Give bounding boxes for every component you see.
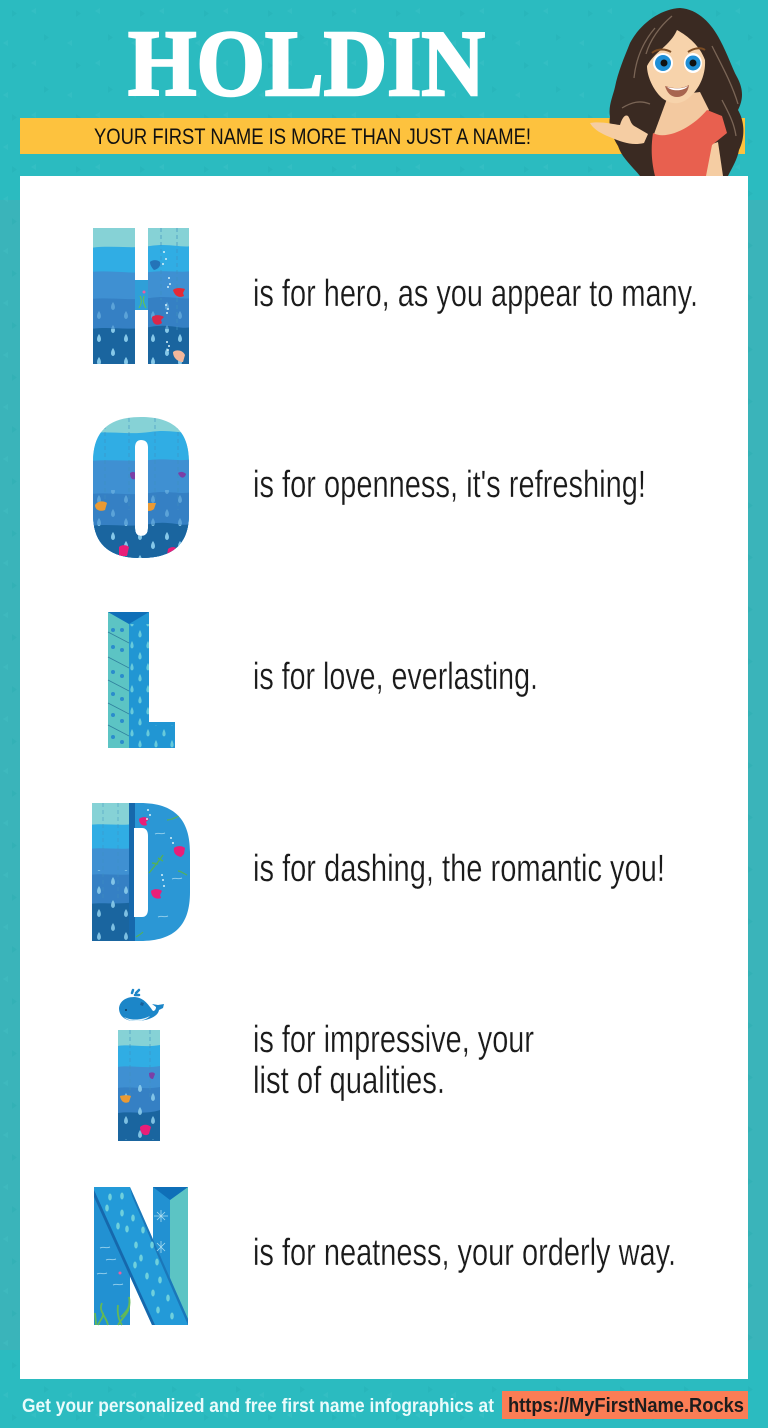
row: letter D: [90, 800, 665, 943]
shirt: [652, 110, 727, 176]
footer link: https://MyFirstName.Rocks: [508, 1395, 744, 1417]
row: letter I: [118, 990, 534, 1141]
row: letter O: [90, 415, 646, 560]
tagline banner: [20, 118, 745, 154]
tagline banner: YOUR FIRST NAME IS MORE THAN JUST A NAME!: [94, 124, 531, 149]
neck and chest: [654, 92, 709, 138]
text: impressive: [253, 1019, 534, 1102]
text: openness: is for openness, it's refreshing!: [253, 464, 646, 506]
text: love: is for love, everlasting.: [253, 656, 538, 698]
footer text: Get your personalized and free first name infographics at: [22, 1396, 495, 1417]
face: [647, 30, 705, 103]
letter N graphic: [94, 1187, 188, 1325]
row: letter L: [108, 612, 538, 748]
icon: whale: [119, 990, 164, 1021]
right arm: [705, 142, 723, 176]
eyebrows: [652, 48, 705, 53]
illustration: woman presenting: [590, 8, 743, 176]
letter L graphic: [108, 612, 175, 748]
row: letter H: [90, 225, 698, 367]
arm: [590, 115, 648, 144]
title: HOLDIN: [128, 12, 485, 116]
letter O graphic: [90, 415, 192, 560]
eyes: [653, 53, 702, 73]
letter H graphic: [90, 225, 192, 367]
smile: [665, 85, 689, 97]
letter I graphic: [118, 990, 164, 1141]
text: impressive: list of qualities.: [253, 1060, 445, 1102]
hair highlights: [618, 16, 738, 136]
footer: [22, 1391, 748, 1419]
letter D graphic: [90, 800, 192, 943]
text: impressive: is for impressive, your: [253, 1019, 534, 1061]
row: letter N: [94, 1187, 676, 1325]
hair back: [609, 8, 743, 176]
main white panel: [20, 176, 748, 1379]
